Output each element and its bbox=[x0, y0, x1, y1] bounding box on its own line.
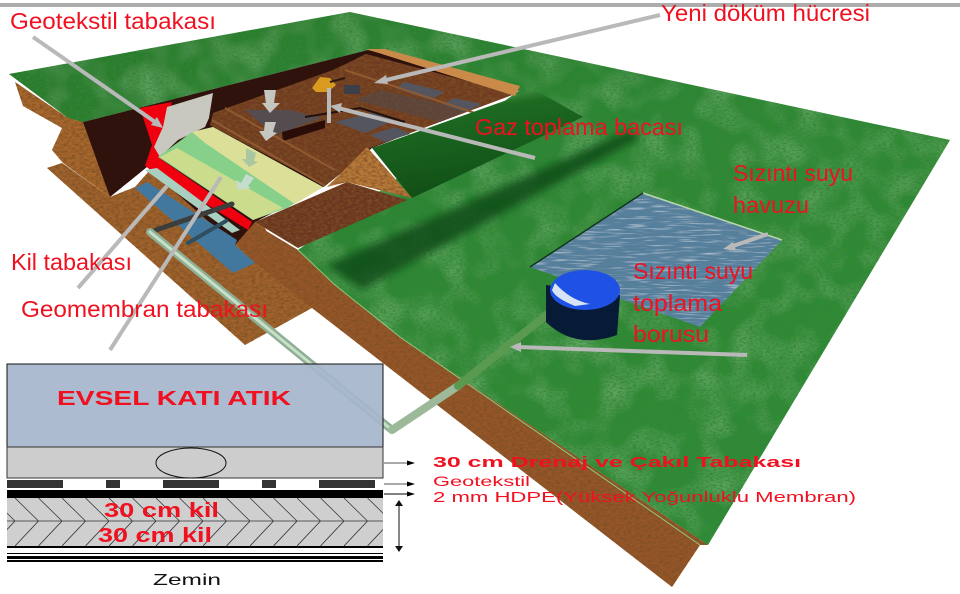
icons: downward white arrows bbox=[236, 90, 280, 190]
HDPE membrane bbox=[7, 490, 383, 498]
geotextile: white layer bbox=[154, 93, 213, 157]
label: drainage: 30 cm Drenaj ve Çakıl Tabakası bbox=[433, 454, 801, 471]
gravel stone bbox=[156, 448, 226, 478]
arrow: geotextile bbox=[33, 37, 163, 128]
clay layers bbox=[7, 498, 383, 546]
berm: outer slope dark band bbox=[327, 130, 640, 290]
arrow: pipe bbox=[510, 342, 747, 355]
soil rim of pit bbox=[366, 49, 520, 96]
callout: gas stack: Gaz toplama bacası bbox=[475, 114, 683, 140]
ground: left soil block bbox=[15, 82, 110, 197]
soil section bbox=[327, 147, 412, 198]
leachate pipe bbox=[150, 204, 550, 430]
gravel layer bbox=[7, 447, 383, 478]
arrow: pond bbox=[723, 234, 768, 250]
label: ground: Zemin bbox=[153, 572, 221, 589]
callout: leachate pipe: borusu bbox=[633, 321, 709, 347]
leader arrows bbox=[33, 15, 768, 355]
callout: pond: Sızıntı suyu bbox=[733, 160, 853, 186]
arrow: gas stack bbox=[329, 88, 535, 158]
label: HDPE: 2 mm HDPE(Yüksek Yoğunluklu Membran) bbox=[433, 489, 856, 506]
geomembrane: red layer bbox=[140, 102, 252, 230]
icon: leachate tank bbox=[546, 270, 620, 340]
callout: new cell: Yeni döküm hücresi bbox=[661, 0, 870, 26]
arrow: geomembrane bbox=[110, 177, 221, 350]
arrows to layer labels bbox=[384, 460, 415, 496]
arrow: clay bbox=[78, 186, 167, 288]
pit floor details bbox=[212, 70, 490, 186]
label: clay 1: 30 cm kil bbox=[104, 500, 219, 522]
thickness arrow bbox=[395, 500, 403, 552]
leachate pond bbox=[530, 193, 782, 327]
front soil edge highlight bbox=[298, 250, 700, 545]
drainage layer: green bbox=[158, 127, 323, 220]
cross-section diagram bbox=[7, 364, 415, 589]
label: waste: EVSEL KATI ATIK bbox=[57, 388, 292, 410]
drainage layer: upper gravel band bbox=[192, 127, 323, 204]
geotextile blocks bbox=[7, 480, 375, 488]
waste layer bbox=[7, 364, 383, 447]
arrow: new cell bbox=[374, 15, 660, 84]
berm: inner slope bbox=[372, 90, 583, 198]
pit floor: new cell bbox=[210, 54, 515, 186]
callout: clay: Kil tabakası bbox=[11, 249, 132, 275]
pit base: rear wall bbox=[83, 50, 520, 245]
callout: leachate pipe: toplama bbox=[633, 290, 722, 316]
top grey rule bbox=[0, 3, 960, 7]
clay layer strip bbox=[145, 168, 240, 233]
blue base layer bbox=[135, 182, 255, 273]
callout: pond: havuzu bbox=[733, 192, 809, 218]
label: clay 2: 30 cm kil bbox=[98, 525, 212, 547]
icon: excavator bbox=[312, 77, 360, 94]
label: geotextile: Geotekstil bbox=[433, 473, 530, 489]
drainage layer: lower gravel band bbox=[160, 148, 283, 220]
callout: geotextile: Geotekstil tabakası bbox=[10, 8, 216, 34]
ground: lower soil ledge bbox=[47, 163, 312, 345]
callout: leachate pipe: Sızıntı suyu bbox=[633, 258, 753, 284]
ground lines bbox=[7, 546, 383, 562]
ground: front soil face bbox=[237, 223, 708, 587]
callout: geomembrane: Geomembran tabakası bbox=[21, 296, 268, 322]
